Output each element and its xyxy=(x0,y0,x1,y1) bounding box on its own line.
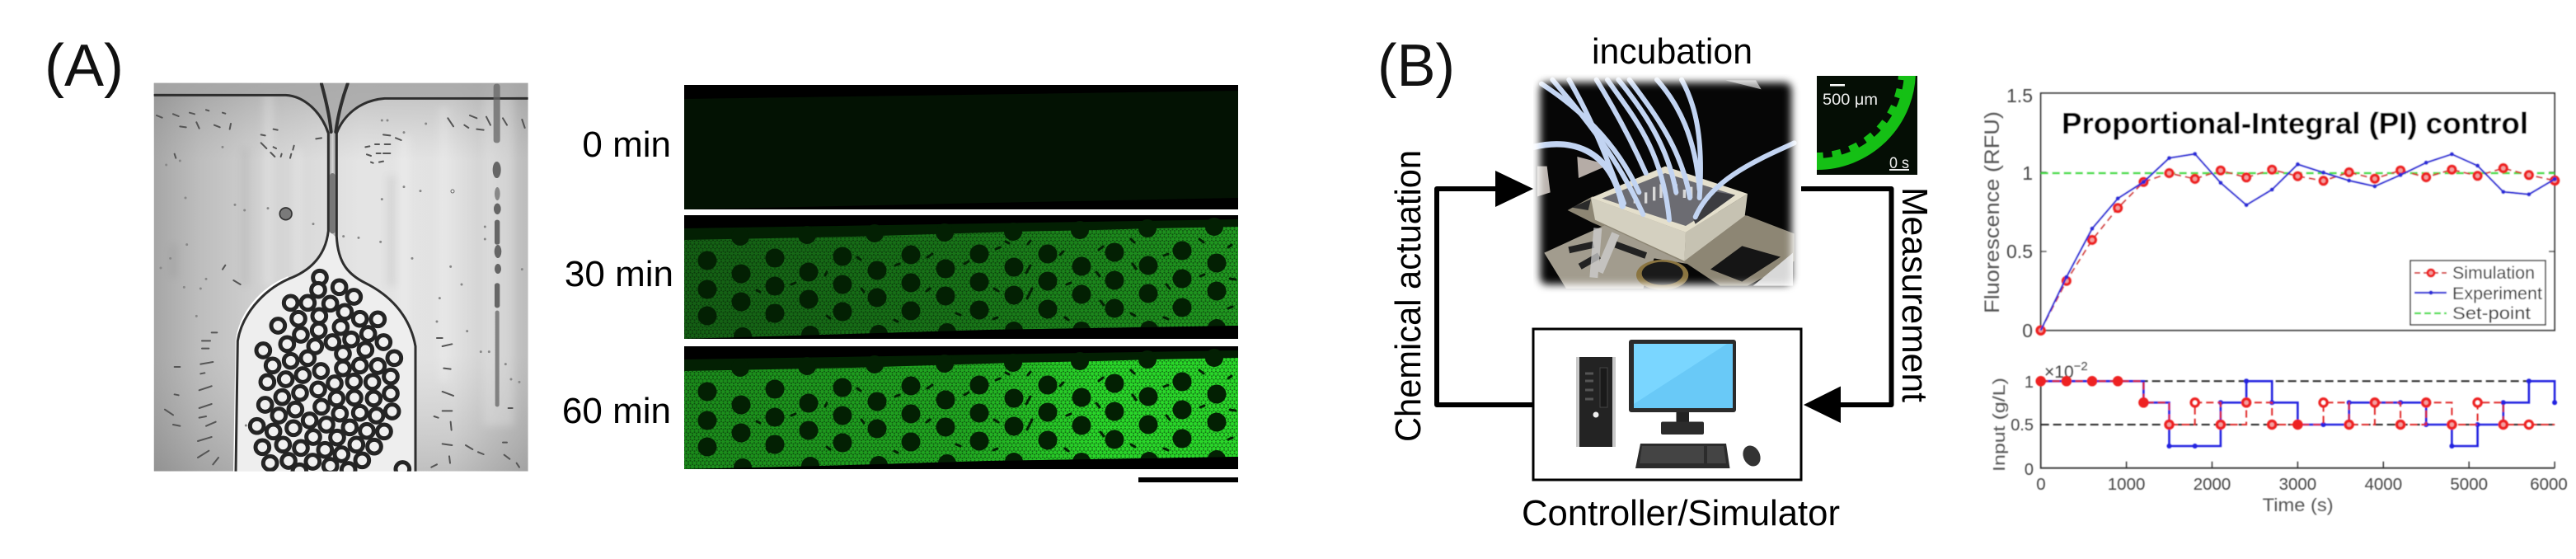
label: 0 min: 0 min xyxy=(582,124,671,165)
photo: microfluidic device with tubing xyxy=(1533,74,1805,294)
y-axis title: Fluorescence (RFU) xyxy=(1981,111,2004,313)
vertical streak on the right of the micrograph xyxy=(493,84,501,406)
x-axis tick labels: 6000 xyxy=(2530,475,2568,494)
panel label: A: (A) xyxy=(45,33,124,99)
debris specks xyxy=(157,110,525,467)
chart: fluorescence vs time xyxy=(1981,85,2559,341)
simulation input steps xyxy=(2037,378,2555,429)
x-axis tick labels: 2000 xyxy=(2194,475,2231,494)
label: chemical actuation: Chemical actuation xyxy=(1388,150,1429,442)
set-point line xyxy=(2041,172,2555,174)
experiment input steps xyxy=(2041,378,2557,449)
label: controller/simulator: Controller/Simulator xyxy=(1522,493,1840,533)
x-axis tick labels: 4000 xyxy=(2364,475,2402,494)
label: measurement: Measurement xyxy=(1894,187,1935,402)
label: incubation: incubation xyxy=(1592,31,1753,72)
multiplier: −2 xyxy=(2074,359,2088,373)
simulation series xyxy=(2037,165,2559,334)
y-axis tick labels: 0.5 xyxy=(2011,416,2034,435)
chart: input vs time xyxy=(1991,359,2568,515)
chart title: Proportional-Integral (PI) control xyxy=(2062,106,2528,140)
fluorescence strip: 0 min xyxy=(684,85,1238,209)
label: 60 min: 60 min xyxy=(562,391,671,431)
x-axis tick labels: 3000 xyxy=(2279,475,2316,494)
y-axis tick labels: 1 xyxy=(2022,162,2033,184)
y-axis tick labels xyxy=(2006,85,2033,341)
y-axis tick labels xyxy=(2011,373,2034,479)
label: 30 min: 30 min xyxy=(565,254,673,294)
inset: fluorescent gear ring at 0 s: 0 s xyxy=(1889,155,1909,172)
inset: fluorescent gear ring at 0 s: 500 μm xyxy=(1823,92,1878,109)
legend: Set-point xyxy=(2452,304,2531,323)
bead ring cluster xyxy=(250,270,410,478)
y-axis tick labels: 1 xyxy=(2025,373,2034,392)
arrow: measurement loop xyxy=(1801,189,1891,423)
y-axis tick labels: 0 xyxy=(2022,320,2033,341)
arrow: chemical actuation loop xyxy=(1437,171,1534,405)
x-axis tick labels: 1000 xyxy=(2108,475,2145,494)
icon: desktop computer xyxy=(1576,340,1764,469)
fluorescence strip: 30 min xyxy=(680,215,1241,350)
fluorescence strip: 60 min xyxy=(680,346,1241,479)
computer box xyxy=(1533,329,1801,480)
legend: Experiment xyxy=(2452,284,2542,303)
y-axis tick labels: 0.5 xyxy=(2006,241,2033,262)
experiment series xyxy=(2041,152,2557,331)
y-axis tick labels: 0 xyxy=(2025,461,2034,479)
panel label: B: (B) xyxy=(1377,33,1455,99)
x-axis tick labels: 0 xyxy=(2036,475,2046,494)
inset: fluorescent gear ring at 0 s xyxy=(1817,76,1917,175)
y-axis title: Input (g/L) xyxy=(1991,378,2009,472)
scale bar xyxy=(1138,477,1238,482)
y-axis tick labels: 1.5 xyxy=(2006,85,2033,106)
legend xyxy=(2410,261,2546,325)
legend: Simulation xyxy=(2452,264,2535,283)
x-axis title: Time (s) xyxy=(2263,495,2334,515)
x-axis tick labels xyxy=(2036,475,2568,494)
micrograph: droplet chamber with beads xyxy=(154,82,528,478)
multiplier: ×10 xyxy=(2044,363,2074,382)
x-axis tick labels: 5000 xyxy=(2450,475,2488,494)
tubing bundle xyxy=(1533,80,1795,220)
